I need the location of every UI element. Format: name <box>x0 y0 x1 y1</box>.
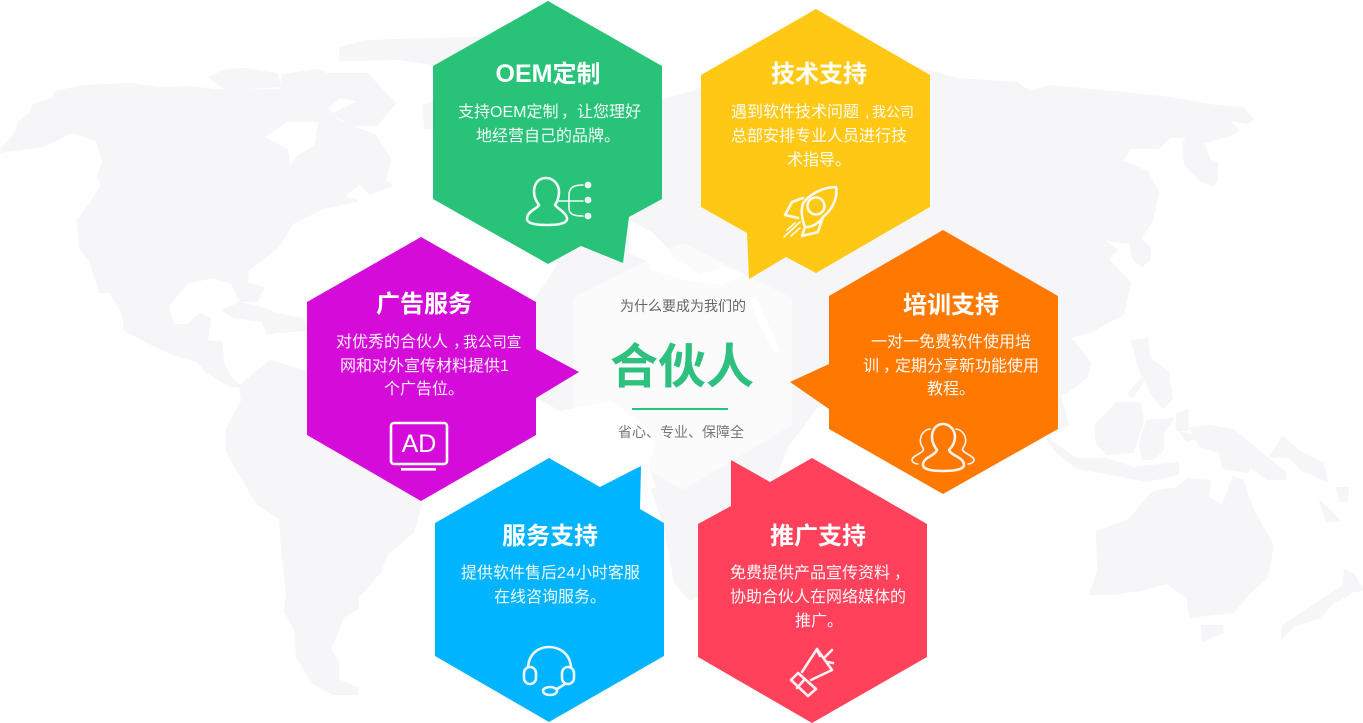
description: 术指导。 <box>787 151 851 169</box>
description: 支持OEM定制 <box>458 103 558 121</box>
panel: technical support <box>701 9 930 279</box>
icon: rocket <box>784 187 836 237</box>
description: 教程。 <box>927 380 975 398</box>
description: 一对一免费软件使用培 <box>871 333 1031 351</box>
panel: training support <box>790 230 1058 494</box>
heading: 技术支持 <box>771 61 867 88</box>
description: 对优秀的合伙人 <box>336 333 448 351</box>
center hexagon panel <box>573 243 792 490</box>
description: , <box>865 104 869 121</box>
description: 个广告位。 <box>384 380 464 398</box>
description: 24小时客服 <box>557 565 640 582</box>
icon: AD screen <box>391 423 447 471</box>
description: 让您理好 <box>577 103 641 121</box>
description: 在线咨询服务。 <box>494 588 606 606</box>
description: ， <box>453 334 469 351</box>
description: 遇到软件技术问题 <box>731 103 859 121</box>
panel: advertising service <box>307 237 579 501</box>
description: 总部安排专业人员进行技 <box>731 127 907 145</box>
description: 我公司宣 <box>463 334 521 351</box>
center heading: 合伙人 <box>610 341 754 394</box>
description: 提供软件售后 <box>461 564 557 582</box>
icon: megaphone <box>791 649 833 696</box>
description: ， <box>561 104 577 121</box>
panel: customer service support <box>435 458 664 722</box>
icon: group of people <box>912 424 974 471</box>
icon: AD screen: AD <box>402 430 436 458</box>
description: 网和对外宣传材料提供1 <box>340 357 509 375</box>
panel: OEM customization <box>433 1 662 264</box>
heading: 培训支持 <box>903 292 999 319</box>
panel: promotion support <box>698 458 927 723</box>
description: 地经营自己的品牌。 <box>476 127 620 145</box>
description: 我公司 <box>872 104 914 120</box>
description: 免费提供产品宣传资料 <box>730 564 890 582</box>
description: 推广。 <box>795 612 843 630</box>
description: 训 <box>863 357 879 375</box>
center tagline: 省心、专业、保障全 <box>618 424 744 440</box>
heading: 服务支持 <box>502 523 598 550</box>
heading: 广告服务 <box>376 291 472 318</box>
description: 协助合伙人在网络媒体的 <box>730 587 906 606</box>
heading: OEM定制 <box>496 60 600 88</box>
icon: person with branches <box>527 178 591 225</box>
description: ， <box>894 565 910 582</box>
center divider line <box>632 408 728 410</box>
icon: headset <box>524 647 574 695</box>
center intro text: 为什么要成为我们的 <box>620 298 746 314</box>
description: ，定期分享新功能使用 <box>883 358 1039 375</box>
heading: 推广支持 <box>770 523 866 550</box>
